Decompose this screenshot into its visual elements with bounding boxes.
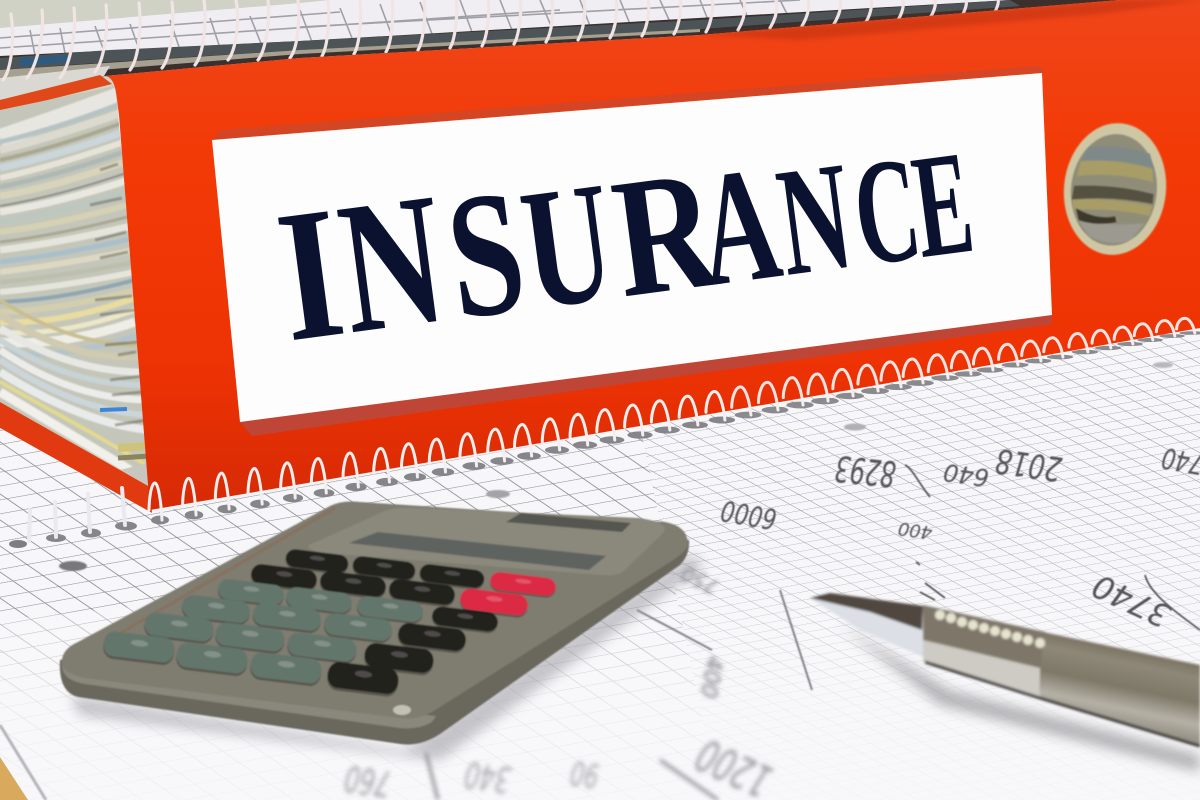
front spiral holes and wires xyxy=(9,318,1200,571)
top spiral wires xyxy=(3,0,998,80)
binder spine xyxy=(105,0,1200,510)
pen under-edge xyxy=(925,662,1200,746)
title: INSURANCE: N xyxy=(329,153,455,373)
pen tip xyxy=(810,594,923,657)
title: INSURANCE: S xyxy=(437,151,535,357)
back cover of binder xyxy=(0,75,112,112)
calculator shadow xyxy=(70,555,705,760)
display screen xyxy=(349,532,606,570)
handwritten notes out of focus xyxy=(342,561,780,800)
solar strip xyxy=(506,513,631,532)
handwritten notes out of focus: 340 xyxy=(462,752,513,799)
title: INSURANCE: E xyxy=(904,120,981,290)
handwritten notes in focus: 640 xyxy=(942,458,991,492)
pen xyxy=(810,593,1200,746)
plastic label sleeve xyxy=(212,66,1046,140)
pen barrel xyxy=(1040,632,1200,745)
calculator xyxy=(60,502,689,745)
corner highlight xyxy=(393,705,411,715)
calculator side xyxy=(60,540,689,745)
handwritten notes in focus xyxy=(718,440,1200,635)
shadow from upper notebook on spine xyxy=(700,0,1200,40)
handwritten notes out of focus: 400 xyxy=(695,654,727,700)
calculator face xyxy=(62,502,688,718)
title: INSURANCE: A xyxy=(689,132,789,321)
grip dots xyxy=(935,610,1045,648)
pen-side strokes on page xyxy=(637,590,812,690)
calculator front bevel xyxy=(62,665,436,728)
title: INSURANCE: I xyxy=(267,166,354,381)
binder finger hole xyxy=(1057,118,1173,260)
handwritten notes in focus: 2018 xyxy=(993,440,1064,488)
brown edge reflection xyxy=(112,508,335,638)
background notebook with spiral xyxy=(0,0,1200,100)
title: INSURANCE: R xyxy=(603,134,729,333)
handwritten notes out of focus: 750 xyxy=(677,561,722,599)
title: INSURANCE: N xyxy=(769,129,861,309)
front notebook page xyxy=(0,328,1200,800)
lower plastic sleeve edge xyxy=(240,315,1052,436)
lower back cover of binder xyxy=(0,402,152,513)
handwritten notes in focus: 400 xyxy=(897,517,934,543)
black keys xyxy=(250,548,499,698)
handwritten notes in focus: 3740 xyxy=(1087,566,1176,635)
display bezel xyxy=(308,508,664,575)
paper stack inside binder xyxy=(0,85,160,495)
gap above paper stack xyxy=(0,98,60,132)
white label xyxy=(212,73,1052,422)
handwritten notes in focus: 6000 xyxy=(718,493,779,535)
backdrop behind the binder xyxy=(0,0,1200,110)
green keys xyxy=(102,578,424,687)
red keys xyxy=(459,571,557,619)
pen grip xyxy=(923,605,1045,697)
handwritten notes out of focus: 90 xyxy=(568,753,601,795)
pen shadow xyxy=(840,625,1200,772)
title: INSURANCE: C xyxy=(845,125,929,298)
handwritten notes in focus: 8293 xyxy=(833,446,898,494)
title: INSURANCE: U xyxy=(512,146,623,346)
